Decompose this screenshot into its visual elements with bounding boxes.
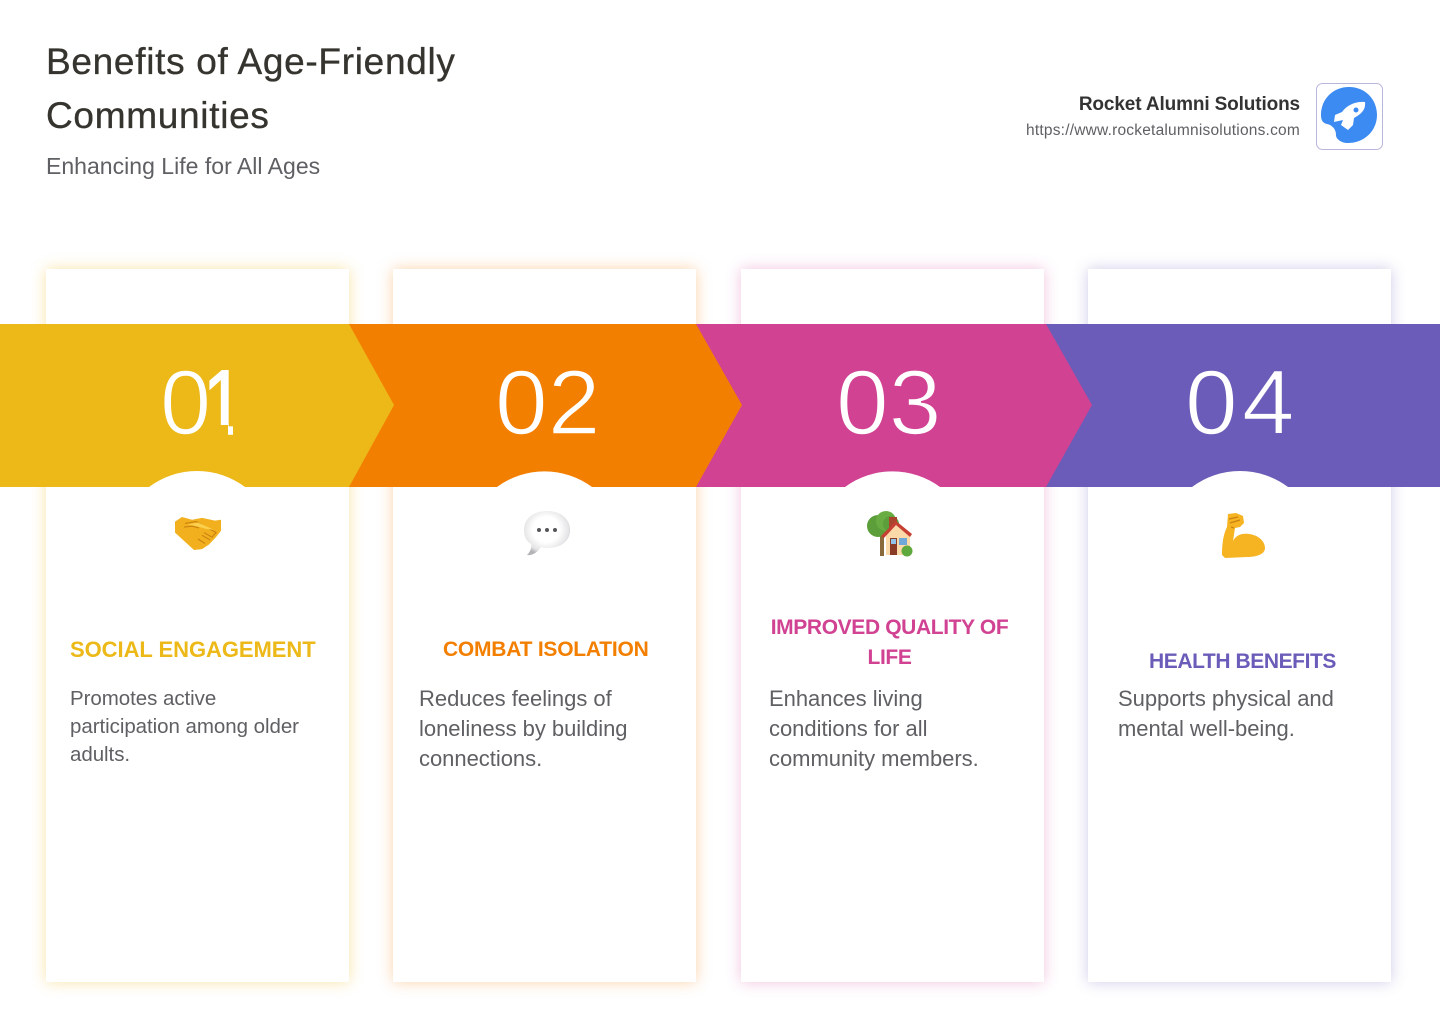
text: health benefits: Supports physical and xyxy=(1118,686,1334,711)
title xyxy=(46,41,456,136)
panel: card 3 xyxy=(741,269,1044,982)
text: combat isolation: connections. xyxy=(419,746,542,771)
heading: improved quality of life: LIFE xyxy=(867,646,912,669)
text: improved quality of life xyxy=(769,686,979,771)
icon: handshake xyxy=(175,517,221,550)
title: Benefits of Age-Friendly xyxy=(46,41,456,82)
text: combat isolation: loneliness by building xyxy=(419,716,627,741)
text: combat isolation: Reduces feelings of xyxy=(419,686,612,711)
number 03: 03 xyxy=(836,352,941,454)
panel: card 2 xyxy=(393,269,696,982)
number 01: 0 xyxy=(160,352,203,454)
brand name: Rocket Alumni Solutions xyxy=(1079,94,1300,115)
heading: health benefits: HEALTH BENEFITS xyxy=(1149,650,1336,673)
heading: social engagement: SOCIAL ENGAGEMENT xyxy=(70,637,316,662)
brand url: https://www.rocketalumnisolutions.com xyxy=(1026,122,1300,139)
panel: card 1 xyxy=(46,269,349,982)
arrow: 03 xyxy=(696,324,1092,487)
chevron ribbon xyxy=(0,324,1440,487)
icon: rocket logo xyxy=(1316,83,1383,150)
title: Communities xyxy=(46,95,270,136)
arcs xyxy=(149,471,1288,487)
icon: speech bubble xyxy=(524,511,570,556)
text: health benefits: mental well-being. xyxy=(1118,716,1295,741)
text: social engagement: Promotes active xyxy=(70,687,216,710)
text: combat isolation xyxy=(419,686,627,771)
text: social engagement: participation among older xyxy=(70,715,299,738)
arrow: 04 xyxy=(1046,324,1440,487)
arrow: 01 xyxy=(0,324,394,487)
text: social engagement xyxy=(70,687,299,766)
heading: improved quality of life: IMPROVED QUALITY OF xyxy=(771,616,1008,639)
subtitle: Enhancing Life for All Ages xyxy=(46,153,320,179)
text: social engagement: adults. xyxy=(70,743,130,766)
number 01 xyxy=(160,352,244,454)
text: improved quality of life: community members. xyxy=(769,746,979,771)
text: health benefits xyxy=(1118,686,1334,741)
arrow: 02 xyxy=(349,324,742,487)
heading: improved quality of life xyxy=(771,616,1008,669)
number 04: 04 xyxy=(1185,352,1299,454)
text: improved quality of life: conditions for all xyxy=(769,716,927,741)
heading: combat isolation: COMBAT ISOLATION xyxy=(443,638,649,661)
number 01: 1 xyxy=(203,352,244,454)
text: improved quality of life: Enhances living xyxy=(769,686,923,711)
icon: house with tree xyxy=(867,511,912,556)
icon: flexed biceps xyxy=(1222,513,1265,558)
number 02: 02 xyxy=(495,352,600,454)
panel: card 4 xyxy=(1088,269,1391,982)
